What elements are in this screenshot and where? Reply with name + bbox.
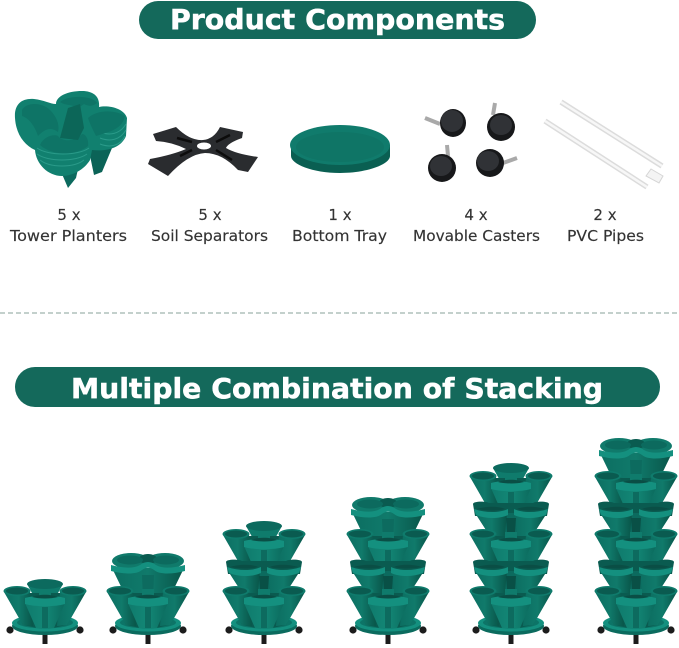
icon: bottom tray: [290, 125, 390, 173]
icon: PVC pipes: [545, 102, 663, 187]
icon: movable casters: [425, 103, 517, 182]
heading: Product Components: Product Components: [170, 3, 505, 36]
stack: 3 tiers: [222, 521, 306, 644]
label: movable casters: Movable Casters: [413, 227, 540, 245]
stack: 5 tiers: [470, 463, 552, 644]
label: PVC pipes: 2 x: [593, 206, 617, 224]
label: PVC pipes: PVC Pipes: [567, 227, 644, 245]
panel: product components: [15, 91, 663, 188]
heading: Multiple Combination of Stacking: Multiple Combination of Stacking: [71, 372, 603, 405]
label: movable casters: [413, 206, 540, 245]
icon: tower planters: [15, 91, 127, 188]
label: bottom tray: 1 x: [328, 206, 352, 224]
stack: 4 tiers: [346, 497, 430, 644]
label: bottom tray: [292, 206, 387, 245]
stack: 6 tiers: [594, 438, 678, 644]
label: soil separators: 5 x: [198, 206, 222, 224]
label: movable casters: 4 x: [464, 206, 488, 224]
label: tower planters: 5 x: [57, 206, 81, 224]
heading: Multiple Combination of Stacking: [15, 367, 660, 407]
label: bottom tray: Bottom Tray: [292, 227, 387, 245]
label: tower planters: Tower Planters: [9, 227, 127, 245]
label: tower planters: [9, 206, 127, 245]
stack: 1 tier: [4, 579, 86, 644]
icon: soil separators: [148, 127, 258, 176]
component labels: [9, 206, 644, 245]
label: PVC pipes: [567, 206, 644, 245]
label: soil separators: Soil Separators: [151, 227, 268, 245]
label: soil separators: [151, 206, 268, 245]
stack: 2 tiers: [106, 553, 190, 644]
chart: stacking combinations: [4, 438, 678, 644]
